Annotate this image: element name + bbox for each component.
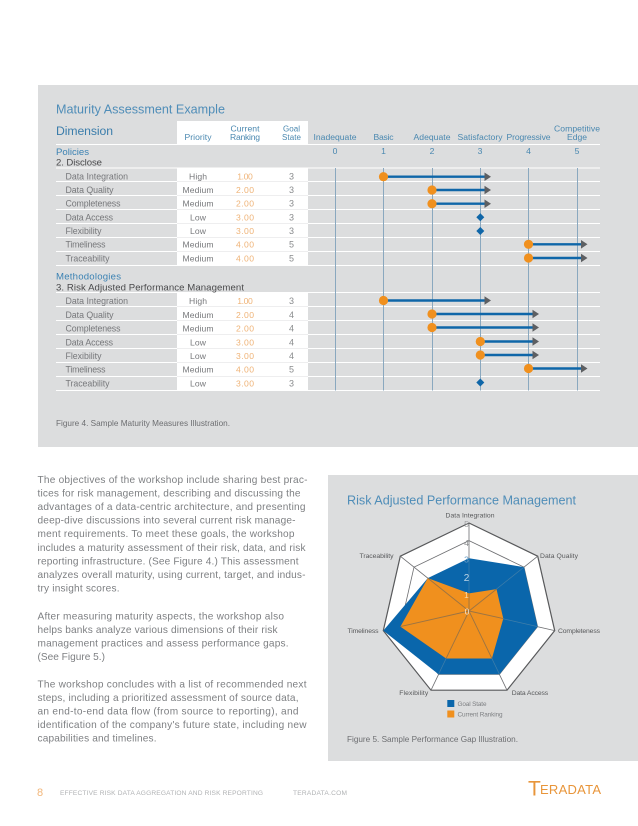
radar spokes over current ranking (400, 578, 503, 658)
section: methodologies risk adjusted performance management: 3. Risk Adjusted Performance Management (56, 282, 244, 294)
table rows: risk adjusted: 4 (289, 351, 294, 361)
gap markers: risk adjusted (379, 296, 588, 386)
radar scale labels (464, 519, 470, 616)
paragraph 1: advantages of a data-centric architecture, and presenting (38, 502, 306, 513)
footer (37, 778, 601, 800)
paragraph 1: reporting infrastructure. (See Figure 4.) This assessment (38, 556, 299, 567)
table rows: disclose: Medium (182, 254, 214, 264)
maturity scale gridlines (336, 168, 578, 390)
paragraph 1: tices for risk management, describing and discussing the (38, 489, 301, 500)
table header: Progressive (506, 132, 551, 142)
table header: Current (230, 124, 260, 134)
table rows: risk adjusted: Medium (182, 310, 214, 320)
table rows: disclose: 5 (289, 254, 294, 264)
table header: Priority (184, 132, 212, 142)
table rows: risk adjusted: Low (190, 378, 207, 388)
panel: risk adjusted performance management (328, 475, 638, 761)
paragraph 2: After measuring maturity aspects, the workshop also (38, 611, 284, 622)
footer title: EFFECTIVE RISK DATA AGGREGATION AND RISK REPORTING (60, 790, 263, 797)
paragraph 1: analyzes overall maturity, using current, target, and indus- (38, 570, 306, 581)
paragraph 3: The workshop concludes with a list of recommended next (38, 679, 307, 690)
table rows: disclose: Completeness (66, 198, 121, 208)
table rows: risk adjusted: Low (190, 338, 207, 348)
logo: Teradata (528, 778, 601, 800)
section: policies disclose (56, 147, 102, 168)
radar scale labels: 3 (464, 554, 469, 564)
paragraph 1: try insight scores. (38, 583, 120, 594)
table rows: risk adjusted: 5 (289, 364, 294, 374)
table rows: disclose: Flexibility (66, 226, 102, 236)
table rows: risk adjusted: 4 (289, 338, 294, 348)
table rows: risk adjusted: Data Quality (66, 310, 114, 320)
table header: Satisfactory (458, 132, 503, 142)
table rows: disclose: Timeliness (66, 240, 106, 250)
caption: figure 4: Figure 4. Sample Maturity Measures Illustration. (56, 419, 230, 428)
paragraph 2 (38, 611, 288, 663)
table rows: disclose: Data Integration (66, 172, 128, 182)
legend: Current Ranking (458, 712, 503, 718)
radar scale labels: 1 (464, 590, 469, 600)
section: methodologies risk adjusted performance management (56, 272, 244, 294)
paragraph 2: helps banks analyze various dimensions of their risk (38, 625, 278, 636)
maturity scale numbers: 4 (526, 146, 531, 156)
table rows: risk adjusted: Flexibility (66, 351, 102, 361)
table rows: risk adjusted: Timeliness (66, 364, 106, 374)
maturity scale numbers: 1 (381, 146, 386, 156)
logo: Teradata: T (528, 778, 541, 800)
radar spokes over goal state (438, 558, 538, 674)
table rows: disclose: 5 (289, 240, 294, 250)
paragraph 1: deep-dive discussions into several current risk manage- (38, 516, 296, 527)
table rows: disclose: 2.00 (236, 185, 254, 195)
table rows: disclose: Low (190, 212, 207, 222)
table header: Edge (567, 132, 587, 142)
logo: Teradata: ERADATA (540, 782, 601, 797)
table header: State (282, 133, 302, 142)
table rows: disclose: 4.00 (236, 254, 254, 264)
table rows: disclose: 3.00 (236, 212, 254, 222)
table rows: risk adjusted: Data Access (66, 338, 114, 348)
table rows: risk adjusted: 1.00 (237, 296, 253, 306)
table rows: disclose: 3 (289, 226, 294, 236)
radar axis labels: Data Access (512, 690, 549, 697)
table rows: risk adjusted: 3 (289, 378, 294, 388)
maturity scale numbers: 3 (478, 146, 483, 156)
table rows: risk adjusted: 3.00 (236, 378, 254, 388)
table rows: risk adjusted: 4 (289, 310, 294, 320)
table rows: risk adjusted (66, 296, 294, 388)
radar axis labels: Data Quality (540, 553, 579, 560)
paragraph 3: capabilities and timelines. (38, 734, 156, 744)
table rows: disclose: Data Access (66, 212, 114, 222)
table rows: risk adjusted: Low (190, 351, 207, 361)
table rows: risk adjusted: 4.00 (236, 364, 254, 374)
radar scale labels: 2 (464, 573, 470, 584)
radar axis labels: Flexibility (399, 690, 429, 697)
panel: maturity assessment (38, 85, 638, 447)
radar scale labels: 4 (464, 538, 469, 548)
legend (447, 700, 503, 718)
radar scale labels: 5 (464, 519, 469, 529)
table header: Adequate (414, 132, 451, 142)
radar outer frame (383, 523, 555, 690)
radar axis labels: Traceability (360, 553, 394, 560)
table rows: risk adjusted: 2.00 (236, 310, 254, 320)
table header: Inadequate (314, 132, 357, 142)
caption: figure 5: Figure 5. Sample Performance Gap Illustration. (347, 735, 518, 744)
table rows: disclose: 1.00 (237, 172, 253, 182)
maturity scale numbers (333, 146, 580, 156)
page number: 8 (37, 787, 43, 799)
table rows: disclose: Data Quality (66, 185, 114, 195)
table header: Basic (374, 132, 394, 142)
radar inner rings and outer spokes (383, 523, 555, 690)
gap markers: disclose (379, 172, 588, 263)
section: policies disclose: 2. Disclose (56, 158, 102, 168)
radar current ranking area (400, 578, 503, 658)
table header: Goal (283, 124, 300, 134)
paragraph 2: management practices and assess performance gaps. (38, 638, 288, 649)
radar scale labels: 0 (465, 606, 470, 616)
table background columns (177, 121, 308, 390)
table rows: disclose: Low (190, 226, 207, 236)
paragraph 1: includes a maturity assessment of their risk, data, and risk (38, 543, 306, 554)
body text (38, 475, 308, 744)
heading: risk adjusted performance management: Risk Adjusted Performance Management (347, 494, 576, 508)
table rows: risk adjusted: High (189, 296, 207, 306)
table header (56, 124, 600, 142)
radar axis labels: Timeliness (348, 628, 379, 635)
maturity scale numbers: 5 (575, 146, 580, 156)
paragraph 1: The objectives of the workshop include sharing best prac- (38, 475, 308, 486)
paragraph 3: an end-to-end data flow (from source to reporting), and (38, 706, 298, 717)
paragraph 1 (38, 475, 308, 594)
maturity scale numbers: 0 (333, 146, 338, 156)
paragraph 2: (See Figure 5.) (38, 652, 105, 663)
paragraph 1: ment requirements. To meet these goals, the workshop (38, 529, 295, 540)
table rows: disclose: Medium (182, 185, 214, 195)
paragraph 3: steps, including a prioritized assessment of source data, (38, 693, 298, 704)
table header: Dimension (56, 124, 113, 138)
section: methodologies risk adjusted performance management: Methodologies (56, 272, 121, 282)
radar goal state area (383, 558, 538, 674)
table rows: disclose: 3.00 (236, 226, 254, 236)
radar axis labels: Completeness (558, 628, 601, 635)
table rows: risk adjusted: 3 (289, 296, 294, 306)
table rows: risk adjusted: 3.00 (236, 338, 254, 348)
table rows: disclose: 3 (289, 172, 294, 182)
table rows: disclose: High (189, 172, 207, 182)
table rows: risk adjusted: 2.00 (236, 324, 254, 334)
radar axis labels (348, 512, 601, 697)
table rows: disclose: 3 (289, 212, 294, 222)
maturity scale numbers: 2 (430, 146, 435, 156)
table header: Competitive (554, 124, 600, 134)
table rows: disclose: Medium (182, 198, 214, 208)
table rows: risk adjusted: 3.00 (236, 351, 254, 361)
table rows: risk adjusted: Data Integration (66, 296, 128, 306)
paragraph 3: identification of the company's future state, including new (38, 720, 307, 731)
table header: Ranking (230, 132, 260, 142)
heading: maturity assessment example: Maturity Assessment Example (56, 102, 225, 116)
table rows: disclose: 3 (289, 185, 294, 195)
table rows: disclose (66, 172, 294, 264)
table rows: risk adjusted: 4 (289, 324, 294, 334)
radar chart (348, 512, 601, 697)
footer website: TERADATA.COM (293, 790, 347, 797)
table rows: disclose: Medium (182, 240, 214, 250)
table rows: risk adjusted: Medium (182, 324, 214, 334)
legend: Goal State (458, 701, 487, 708)
table rows: risk adjusted: Traceability (66, 378, 110, 388)
section: policies disclose: Policies (56, 147, 89, 158)
table rows: disclose: 4.00 (236, 240, 254, 250)
paragraph 3 (38, 679, 307, 744)
table rows: risk adjusted: Medium (182, 364, 214, 374)
table rows: disclose: 2.00 (236, 198, 254, 208)
table rows: risk adjusted: Completeness (66, 324, 121, 334)
table rows: disclose: Traceability (66, 254, 110, 264)
table rows: disclose: 3 (289, 198, 294, 208)
radar axis labels: Data Integration (446, 512, 495, 520)
